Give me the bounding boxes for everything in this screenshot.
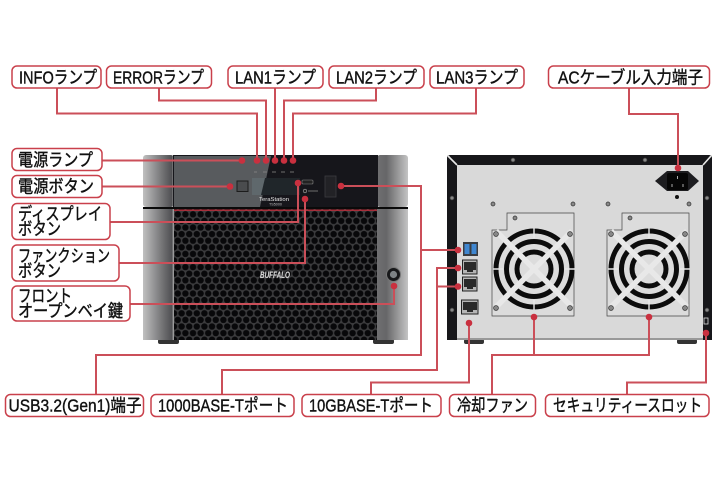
chassis screws bbox=[450, 158, 709, 312]
NAS rear view bbox=[447, 155, 712, 344]
left side panel bbox=[143, 155, 174, 340]
top control panel bbox=[173, 155, 378, 207]
NAS front view bbox=[143, 155, 408, 344]
label: LAN2 lamp: LAN2ランプ bbox=[336, 68, 417, 88]
rear chassis bbox=[447, 155, 712, 340]
leader dots bbox=[227, 157, 709, 336]
label: INFO lamp: INFOランプ bbox=[19, 68, 97, 88]
label: power button: 電源ボタン bbox=[18, 176, 94, 196]
label: USB port: USB3.2(Gen1)端子 bbox=[8, 396, 142, 416]
right side panel bbox=[377, 155, 408, 340]
divider bbox=[143, 207, 408, 209]
product name: TeraStation bbox=[259, 197, 289, 203]
rear feet bbox=[464, 339, 697, 344]
label: front bay key bbox=[12, 286, 130, 321]
label: 10GBASE-T port: 10GBASE-Tポート bbox=[309, 396, 433, 416]
label: front bay key: フロント bbox=[18, 286, 72, 306]
label: cooling fan: 冷却ファン bbox=[457, 396, 528, 416]
label: function button bbox=[12, 245, 119, 281]
label: function button: ファンクション bbox=[18, 246, 110, 266]
label: LAN1 lamp: LAN1ランプ bbox=[235, 68, 316, 88]
label: function button: ボタン bbox=[18, 261, 61, 281]
label: front bay key: オープンベイ鍵 bbox=[18, 301, 123, 321]
BUFFALO logo: BUFFALO bbox=[260, 270, 290, 281]
label: display button: ボタン bbox=[18, 219, 61, 239]
fan left bbox=[492, 213, 575, 316]
feet bbox=[158, 339, 394, 344]
model name: TS5000 bbox=[269, 202, 282, 206]
security slot bbox=[704, 318, 708, 324]
label: ERROR lamp: ERRORランプ bbox=[113, 68, 204, 88]
USB ports bbox=[463, 242, 478, 256]
label: display button bbox=[12, 204, 110, 240]
power inlet bbox=[655, 171, 699, 199]
key lock bbox=[386, 268, 400, 282]
label: display button: ディスプレイ bbox=[18, 204, 102, 224]
label: power lamp: 電源ランプ bbox=[18, 150, 93, 170]
label: AC inlet: ACケーブル入力端子 bbox=[558, 68, 703, 88]
label: LAN3 lamp: LAN3ランプ bbox=[436, 68, 518, 88]
front mesh grille bbox=[174, 209, 377, 340]
label: 1000BASE-T port: 1000BASE-Tポート bbox=[158, 396, 288, 416]
fan right bbox=[607, 213, 690, 316]
10GBASE-T port bbox=[462, 300, 478, 314]
1000BASE-T ports bbox=[462, 260, 477, 291]
leader lines bbox=[57, 88, 706, 394]
